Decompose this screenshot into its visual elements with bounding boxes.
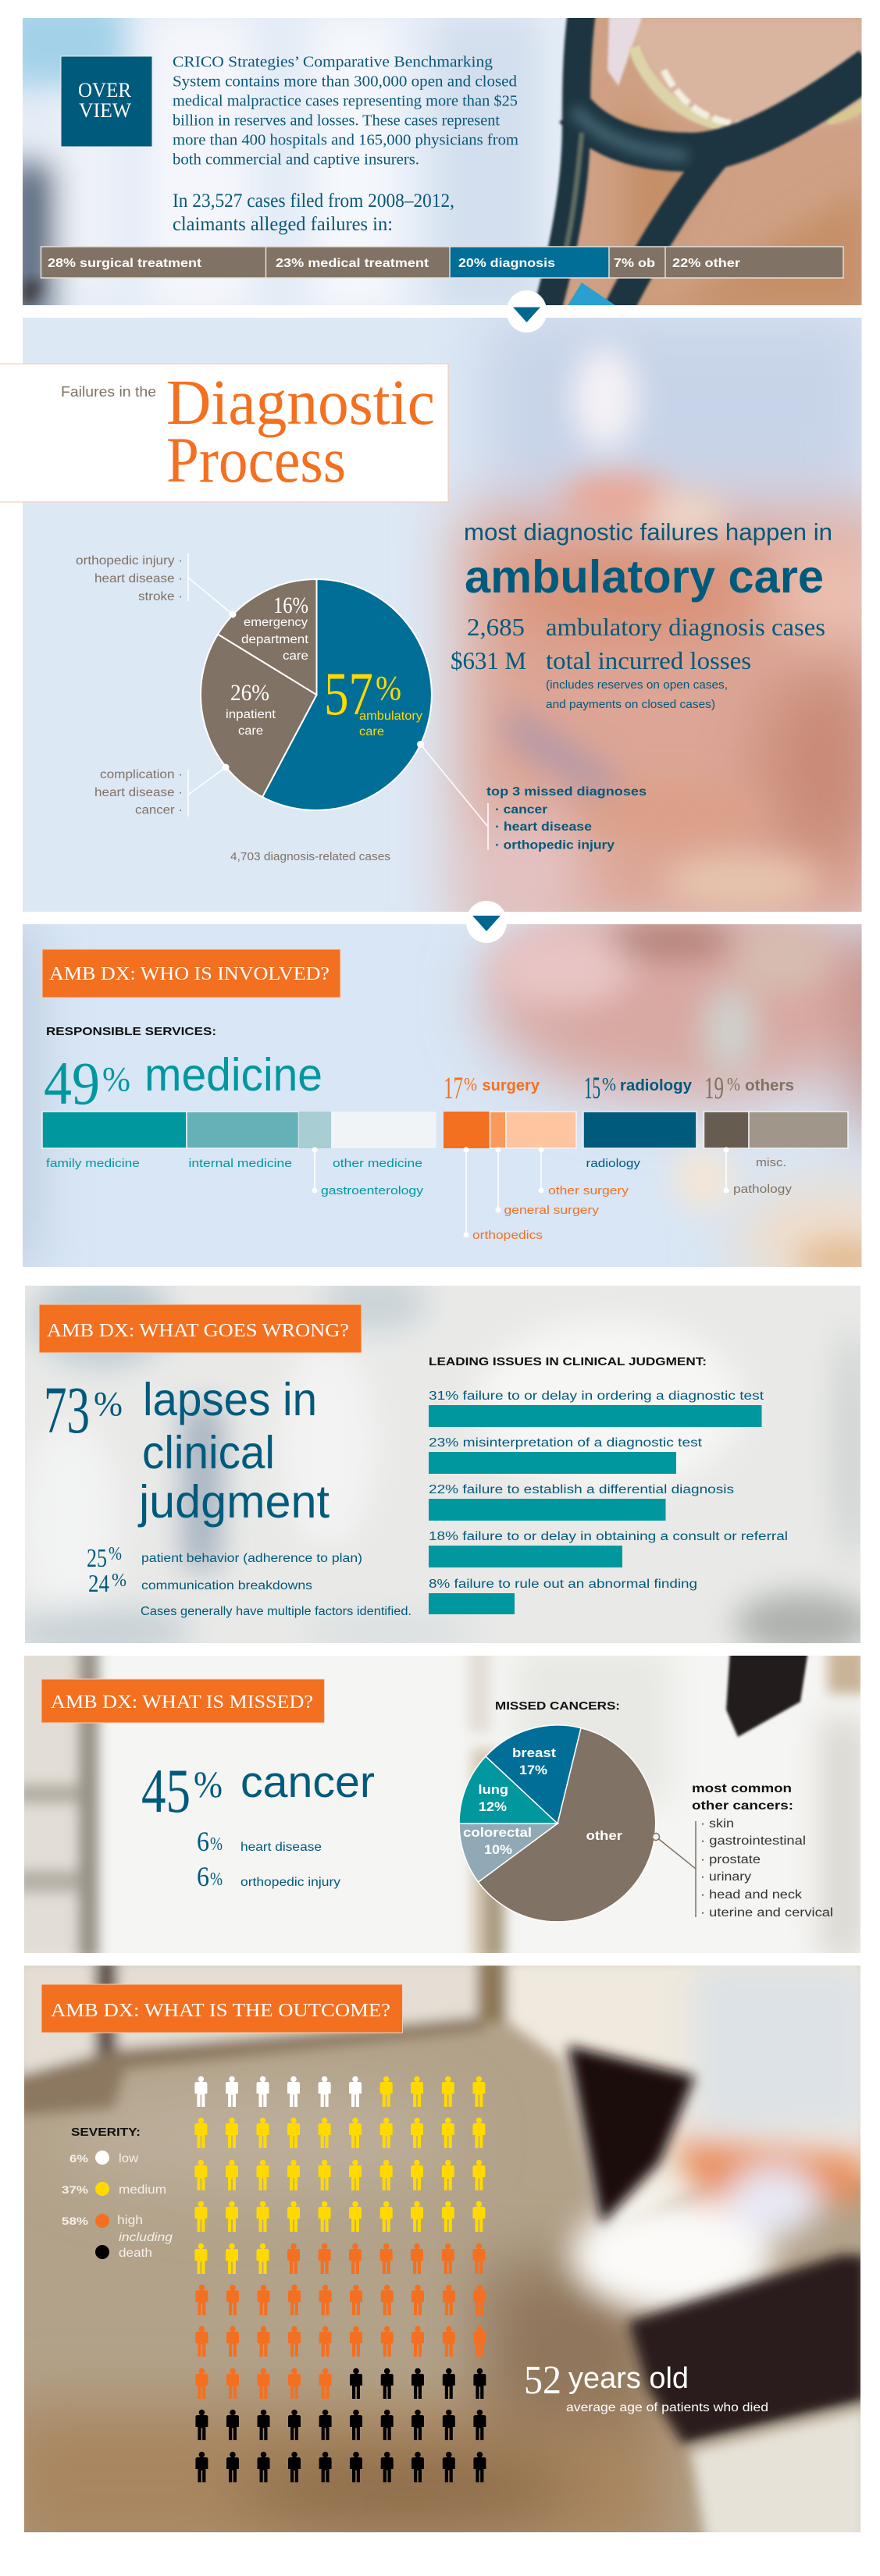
callout: most common other cancers: · urinary	[700, 1870, 751, 1884]
text block: system description: CRICO Strategies’ Comparative Benchmarking	[173, 53, 493, 70]
stat: average age 52 years old: 52	[524, 2358, 561, 2403]
subheading: missed cancers: MISSED CANCERS:	[495, 1699, 620, 1713]
stats: other missed diagnoses: %	[210, 1870, 223, 1890]
pie chart: diagnosis-related cases by setting: %	[376, 669, 401, 707]
stat: 45% cancer: %	[194, 1764, 223, 1806]
callout: most common other cancers: · skin	[700, 1817, 734, 1831]
stats: contributing factors: 24	[88, 1569, 109, 1597]
stat: 73% lapses in clinical judgment: lapses in	[143, 1374, 317, 1425]
pie chart: diagnosis-related cases by setting: ambulatory	[359, 710, 422, 723]
legend: severity: 37%	[62, 2183, 89, 2196]
stacked bar: alleged failures: 20% diagnosis	[458, 257, 555, 270]
callout: most common other cancers: other cancers:	[692, 1799, 793, 1813]
labels: service names with leader lines: family medicine	[46, 1157, 140, 1170]
callout: inpatient diagnoses: complication ·	[100, 768, 183, 781]
stat: 19% others: %	[727, 1075, 740, 1095]
panel: what goes wrong	[8, 1272, 875, 1655]
callout: top 3 missed diagnoses	[417, 741, 647, 852]
panel: who is involved	[23, 924, 862, 1267]
stats: ambulatory cases and losses	[451, 613, 825, 711]
text block: cases filed	[173, 190, 454, 235]
stats: ambulatory cases and losses: (includes reserves on open cases,	[546, 679, 728, 692]
heading: what goes wrong	[39, 1304, 362, 1353]
stat: 73% lapses in clinical judgment: judgment	[137, 1476, 330, 1528]
pictogram: 100 patients by severity	[194, 2076, 486, 2482]
legend: severity: 6%	[69, 2152, 89, 2165]
callout: most common other cancers: most common	[692, 1782, 792, 1795]
stat: 73% lapses in clinical judgment: clinical	[142, 1427, 275, 1478]
labels: service names with leader lines: gastroenterology	[321, 1184, 424, 1197]
stacked bar: alleged failures: 22% other	[672, 257, 740, 270]
pie chart: missed cancers: 12%	[479, 1800, 507, 1814]
stat: 19% others: 19	[704, 1070, 724, 1105]
stat: 15% radiology: 15	[584, 1070, 600, 1105]
legend: severity: medium	[119, 2183, 166, 2197]
labels: service names with leader lines: misc.	[756, 1156, 786, 1169]
pie chart: diagnosis-related cases by setting	[201, 579, 432, 810]
legend: severity: low	[119, 2152, 139, 2165]
stacked bar: alleged failures: 23% medical treatment	[276, 257, 429, 270]
stat: 73% lapses in clinical judgment: 73	[44, 1372, 90, 1447]
bar chart: leading issues in clinical judgment: 18% failure to or delay in obtaining a consult or referral	[429, 1530, 788, 1543]
bar chart: leading issues in clinical judgment: 22% failure to establish a differential diagnosis	[429, 1483, 734, 1496]
text block: system description: billion in reserves and losses. These cases represent	[173, 112, 500, 130]
bar chart: leading issues in clinical judgment	[429, 1389, 788, 1614]
stats: other missed diagnoses: heart disease	[240, 1841, 322, 1854]
stat: 49% medicine: 49	[44, 1049, 100, 1117]
labels: service names with leader lines: radiology	[586, 1157, 641, 1170]
arrow: overview to diagnostic process	[507, 290, 547, 333]
callout: top 3 missed diagnoses: top 3 missed diagnoses	[486, 785, 647, 799]
stats: ambulatory cases and losses: total incurred losses	[546, 646, 751, 674]
heading: failures in the diagnostic process: Process	[166, 424, 346, 496]
legend: severity: SEVERITY:	[71, 2126, 141, 2139]
callout: most common other cancers	[653, 1782, 833, 1920]
callout: top 3 missed diagnoses: · heart disease	[495, 820, 592, 834]
stats: ambulatory cases and losses: ambulatory diagnosis cases	[546, 613, 825, 641]
stacked bar: responsible services	[42, 1112, 848, 1148]
photo: stethoscope on a white coat	[23, 18, 862, 305]
stat: 49% medicine: %	[102, 1060, 130, 1098]
callout: most common other cancers: · head and neck	[700, 1888, 802, 1902]
pie chart: missed cancers: breast	[512, 1746, 557, 1760]
bar chart: leading issues in clinical judgment: 31% failure to or delay in ordering a diagnostic test	[429, 1389, 764, 1403]
stat: 15% radiology	[584, 1070, 693, 1105]
photo: blurred hallway	[16, 1647, 867, 1959]
stacked bar: alleged failures: 7% ob	[614, 257, 655, 270]
callout: emergency department diagnoses: orthopedic injury ·	[76, 554, 183, 568]
stacked bar: alleged failures	[41, 247, 843, 278]
headline: most diagnostic failures happen in ambulatory care: ambulatory care	[465, 551, 824, 603]
subheading: responsible services: RESPONSIBLE SERVICES:	[46, 1025, 216, 1038]
callout: most common other cancers: · prostate	[700, 1853, 761, 1866]
stat: average age 52 years old: average age of patients who died	[566, 2401, 768, 2414]
stat: 49% medicine: medicine	[144, 1049, 322, 1101]
callout: top 3 missed diagnoses: · cancer	[495, 803, 547, 817]
stat: 15% radiology: radiology	[620, 1077, 693, 1094]
subheading: leading issues: LEADING ISSUES IN CLINICAL JUDGMENT:	[429, 1355, 707, 1368]
stats: other missed diagnoses	[197, 1826, 340, 1892]
heading: who is involved	[42, 949, 340, 998]
callout: most common other cancers: · uterine and cervical	[700, 1906, 833, 1920]
callout box: over view: VIEW	[79, 99, 131, 122]
stats: contributing factors: 25	[87, 1544, 107, 1573]
pie chart: diagnosis-related cases by setting: care	[238, 724, 263, 738]
pie chart: missed cancers: other	[586, 1829, 623, 1843]
heading: failures in the diagnostic process: Failures in the	[61, 384, 156, 400]
text block: system description	[173, 53, 518, 169]
pie chart: diagnosis-related cases by setting: 16%	[273, 592, 308, 618]
stacked bar: alleged failures: 28% surgical treatment	[48, 257, 202, 270]
headline: most diagnostic failures happen in ambulatory care: most diagnostic failures happen in	[464, 518, 832, 546]
heading: what goes wrong: AMB DX: WHAT GOES WRONG?	[47, 1321, 349, 1341]
pie chart: diagnosis-related cases by setting: care	[359, 725, 384, 738]
pie chart: missed cancers: colorectal	[463, 1826, 532, 1840]
photo: blurred clinician	[23, 924, 862, 1267]
stat: 15% radiology: %	[602, 1075, 616, 1095]
pie chart: missed cancers	[459, 1725, 656, 1922]
pie chart: diagnosis-related cases by setting: inpatient	[226, 708, 276, 721]
panel: what is missed	[16, 1647, 867, 1959]
legend: severity: high	[117, 2214, 143, 2227]
legend: severity: including	[119, 2231, 173, 2244]
labels: service names with leader lines: other medicine	[333, 1157, 422, 1170]
stat: 19% others	[704, 1070, 794, 1105]
callout box: over view	[61, 56, 152, 147]
pie chart: diagnosis-related cases by setting: care	[283, 649, 308, 663]
stat: 73% lapses in clinical judgment	[44, 1372, 330, 1528]
heading: what is the outcome: AMB DX: WHAT IS THE OUTCOME?	[51, 2001, 390, 2021]
pie chart: diagnosis-related cases by setting: 26%	[230, 680, 269, 706]
stat: 73% lapses in clinical judgment: %	[94, 1385, 123, 1423]
photo: blurred streaks	[8, 1272, 875, 1655]
bar chart: leading issues in clinical judgment: 23% misinterpretation of a diagnostic test	[429, 1436, 703, 1450]
panel: overview	[23, 18, 862, 305]
photo: blurred patient room	[0, 1959, 867, 2560]
stats: contributing factors: patient behavior (adherence to plan)	[141, 1552, 362, 1565]
callout: emergency department diagnoses: stroke ·	[138, 590, 183, 603]
text block: cases filed: In 23,527 cases filed from 2008–2012,	[173, 190, 454, 212]
text block: system description: both commercial and captive insurers.	[173, 151, 419, 169]
stats: ambulatory cases and losses: and payments on closed cases)	[546, 699, 715, 711]
stat: 19% others: others	[745, 1077, 794, 1094]
photo: blurred hand	[23, 312, 880, 937]
stats: other missed diagnoses: 6	[197, 1826, 209, 1857]
text block: system description: medical malpractice cases representing more than $25	[173, 92, 518, 109]
stats: contributing factors	[87, 1544, 411, 1618]
stat: 45% cancer: cancer	[240, 1757, 375, 1807]
stats: ambulatory cases and losses: $631 M	[451, 646, 526, 674]
stat: 17% surgery: 17	[444, 1070, 463, 1105]
pie chart: diagnosis-related cases by setting: 57	[324, 660, 373, 728]
stat: 17% surgery: surgery	[483, 1077, 540, 1094]
pie chart: missed cancers: lung	[478, 1783, 508, 1797]
heading: what is missed: AMB DX: WHAT IS MISSED?	[51, 1692, 313, 1713]
legend: severity: 58%	[62, 2215, 89, 2227]
pie chart: diagnosis-related cases by setting: department	[241, 633, 309, 646]
panel: what is the outcome	[0, 1959, 867, 2560]
stat: average age 52 years old	[524, 2358, 768, 2414]
callout: emergency department diagnoses: heart disease ·	[94, 572, 183, 585]
heading: what is the outcome	[41, 1984, 403, 2033]
stats: other missed diagnoses: orthopedic injury	[240, 1876, 340, 1889]
legend: severity: death	[119, 2247, 152, 2260]
callout: inpatient diagnoses	[94, 763, 230, 817]
callout: top 3 missed diagnoses: · orthopedic injury	[495, 838, 615, 852]
caption: 4,703 diagnosis-related cases: 4,703 diagnosis-related cases	[230, 851, 390, 863]
heading: who is involved: AMB DX: WHO IS INVOLVED?	[49, 964, 330, 984]
labels: service names with leader lines: other surgery	[548, 1184, 629, 1197]
heading: failures in the diagnostic process	[0, 364, 448, 502]
labels: service names with leader lines: general surgery	[504, 1204, 600, 1217]
text block: cases filed: claimants alleged failures in:	[173, 214, 393, 235]
labels: service names with leader lines: internal medicine	[189, 1157, 292, 1170]
callout: most common other cancers: · gastrointestinal	[700, 1834, 806, 1848]
stat: 17% surgery: %	[464, 1075, 477, 1095]
stats: other missed diagnoses: 6	[197, 1861, 209, 1892]
stats: ambulatory cases and losses: 2,685	[467, 613, 525, 641]
pie chart: missed cancers: 10%	[484, 1843, 512, 1857]
heading: failures in the diagnostic process: Diagnostic	[166, 366, 435, 438]
stat: 45% cancer	[141, 1757, 375, 1826]
stats: contributing factors: communication breakdowns	[141, 1579, 312, 1592]
arrow: diagnostic process to who is involved	[466, 901, 507, 943]
pie chart: diagnosis-related cases by setting: emergency	[244, 616, 308, 629]
stats: contributing factors: %	[109, 1544, 122, 1564]
headline: most diagnostic failures happen in ambulatory care	[464, 518, 832, 603]
bar chart: leading issues in clinical judgment: 8% failure to rule out an abnormal finding	[429, 1578, 697, 1591]
stat: 45% cancer: 45	[141, 1757, 191, 1826]
text block: system description: System contains more than 300,000 open and closed	[173, 73, 517, 91]
callout box: over view: OVER	[78, 79, 132, 101]
stat: average age 52 years old: years old	[568, 2362, 689, 2395]
callout: inpatient diagnoses: heart disease ·	[94, 786, 183, 799]
callout: emergency department diagnoses	[76, 553, 236, 618]
labels: service names with leader lines	[46, 1147, 793, 1242]
stats: contributing factors: %	[112, 1571, 126, 1591]
stats: other missed diagnoses: %	[210, 1834, 223, 1855]
text block: system description: more than 400 hospitals and 165,000 physicians from	[173, 131, 518, 148]
callout: inpatient diagnoses: cancer ·	[135, 804, 183, 817]
legend: severity	[62, 2126, 173, 2260]
stats: contributing factors: Cases generally have multiple factors identified.	[141, 1605, 411, 1618]
stat: 17% surgery	[444, 1070, 540, 1105]
panel: failures in the diagnostic process	[0, 312, 880, 937]
labels: service names with leader lines: orthopedics	[472, 1229, 543, 1242]
pie chart: missed cancers: 17%	[519, 1763, 547, 1777]
labels: service names with leader lines: pathology	[733, 1183, 793, 1196]
heading: what is missed	[41, 1679, 325, 1723]
stat: 49% medicine	[44, 1049, 322, 1117]
